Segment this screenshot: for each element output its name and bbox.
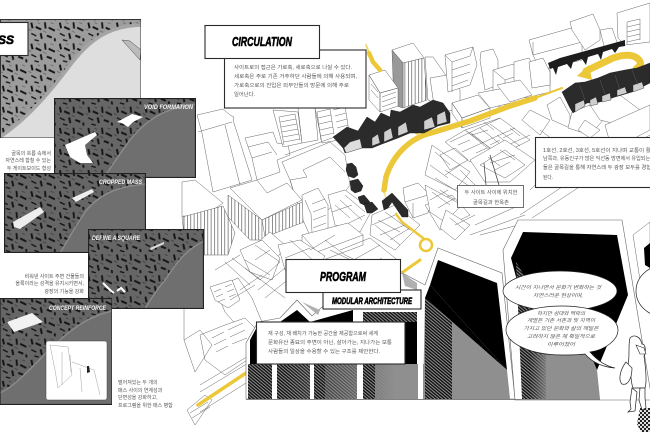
- callout: alley and hanok village: [458, 155, 524, 208]
- panel: concept reinforce: [0, 298, 112, 405]
- icon: person walking: [620, 336, 650, 432]
- elevated rail bridge: [548, 40, 625, 75]
- speech bubble: upper: 자연스러운 현상이며,: [533, 292, 583, 299]
- caption: concept reinforce: [118, 379, 173, 409]
- speech bubble: upper: [503, 271, 617, 311]
- panel: cropped mass: CROPPED MASS: [99, 179, 143, 186]
- heading: program: [286, 260, 400, 292]
- speech bubble: lower: 고려하지 않은 채 획일적으로: [527, 333, 595, 340]
- panel: cropped mass: [4, 173, 146, 253]
- panel: concept reinforce: CONCEPT REINFORCE: [49, 305, 107, 312]
- text block: program: 문화유산 종묘의 주변이 아닌, 살아가는, 지나가는 보통: [268, 339, 392, 346]
- speech bubble: upper: 시간이 지나면서 문화가 변화하는 것: [515, 284, 601, 291]
- callout: alley and hanok village: 두 사이트 사이에 위치한: [464, 189, 518, 196]
- caption: concept reinforce: 매스 사이의 연계성과: [118, 387, 163, 394]
- speech bubble: right edge: [636, 265, 650, 317]
- text block: program: 사람들의 일상을 수용할 수 있는 구조를 제안한다.: [268, 348, 380, 355]
- caption: void formation: [5, 150, 51, 172]
- yellow circulation path: [198, 45, 640, 405]
- city axonometric drawing: [182, 3, 650, 425]
- caption: void formation: 두 게이트보이드 형성: [7, 165, 51, 172]
- comic panel: modular buildings: [246, 220, 650, 400]
- speech bubble: lower: 가지고 있던 문화와 삶의 깨달은: [524, 325, 599, 332]
- text block: circulation: 세로축은 주로 기존 거주하던 사람들에 의해 사용되며,: [234, 73, 357, 80]
- caption: concept reinforce: 단면성을 강화하고,: [118, 394, 158, 401]
- text block: transit info: [536, 138, 650, 188]
- caption: void formation: 골목의 흐름 속에서: [11, 150, 51, 157]
- speech bubble: lower: 이루어졌어: [547, 341, 577, 348]
- panel: define a square: DEFINE A SQUARE: [92, 235, 141, 242]
- caption: void formation: 자연스레 합칠 수 있는: [5, 157, 51, 164]
- text block: circulation: [224, 50, 366, 108]
- speech bubble: lower: 하지만 성대와 맥락의: [537, 310, 585, 317]
- heading: program: PROGRAM: [320, 269, 367, 284]
- caption: define a square: 비워낸 사이트 주변 건물들의: [25, 273, 84, 280]
- panel: mass: [0, 19, 141, 138]
- caption: define a square: 광장의 기능을 강화: [44, 288, 84, 295]
- caption: concept reinforce: 떨어져있는 두 개의: [118, 379, 158, 386]
- text block: program: [256, 322, 405, 364]
- caption: concept reinforce: 프로그램을 위한 매스 병합: [118, 402, 173, 409]
- dark arched roofs: factory row right: [562, 63, 650, 113]
- heading: circulation: CIRCULATION: [232, 34, 292, 49]
- text block: circulation: 일어난다.: [234, 91, 255, 98]
- text block: transit info: 된다.: [543, 174, 553, 181]
- heading: mass: [0, 22, 28, 56]
- text block: transit info: 1호선, 2호선, 3호선, 5호선이 지나며 교통이 활발한: [543, 147, 650, 154]
- subheading: modular architecture: [323, 290, 421, 309]
- subheading: modular architecture: MODULAR ARCHITECTURE: [332, 296, 413, 306]
- panel: void formation: [54, 98, 196, 178]
- text block: program: 재 구성, 재 배치가 가능한 공간을 제공함으로써 세계: [268, 330, 378, 337]
- speech bubble: lower: 개별은 기존 서촌과 및 지역이: [527, 317, 595, 324]
- speech bubble: lower: [506, 306, 618, 368]
- text block: circulation: 사이트로의 접근은 가로축, 세로축으로 나뉠 수 있다.: [234, 64, 352, 71]
- dark arched roofs: factory row left: [333, 100, 450, 153]
- caption: define a square: [15, 273, 84, 295]
- panel: define a square: [88, 229, 204, 309]
- text block: circulation: 가로축으로의 진입은 외부인들의 방문에 의해 주로: [234, 82, 349, 89]
- callout: alley and hanok village: 골목길과 한옥촌: [473, 199, 509, 206]
- panel: void formation: VOID FORMATION: [144, 104, 193, 111]
- heading: circulation: [205, 26, 320, 58]
- caption: define a square: 올록이라는 성격을 유지시키면서,: [15, 280, 84, 287]
- dark mass blocks: [346, 163, 408, 217]
